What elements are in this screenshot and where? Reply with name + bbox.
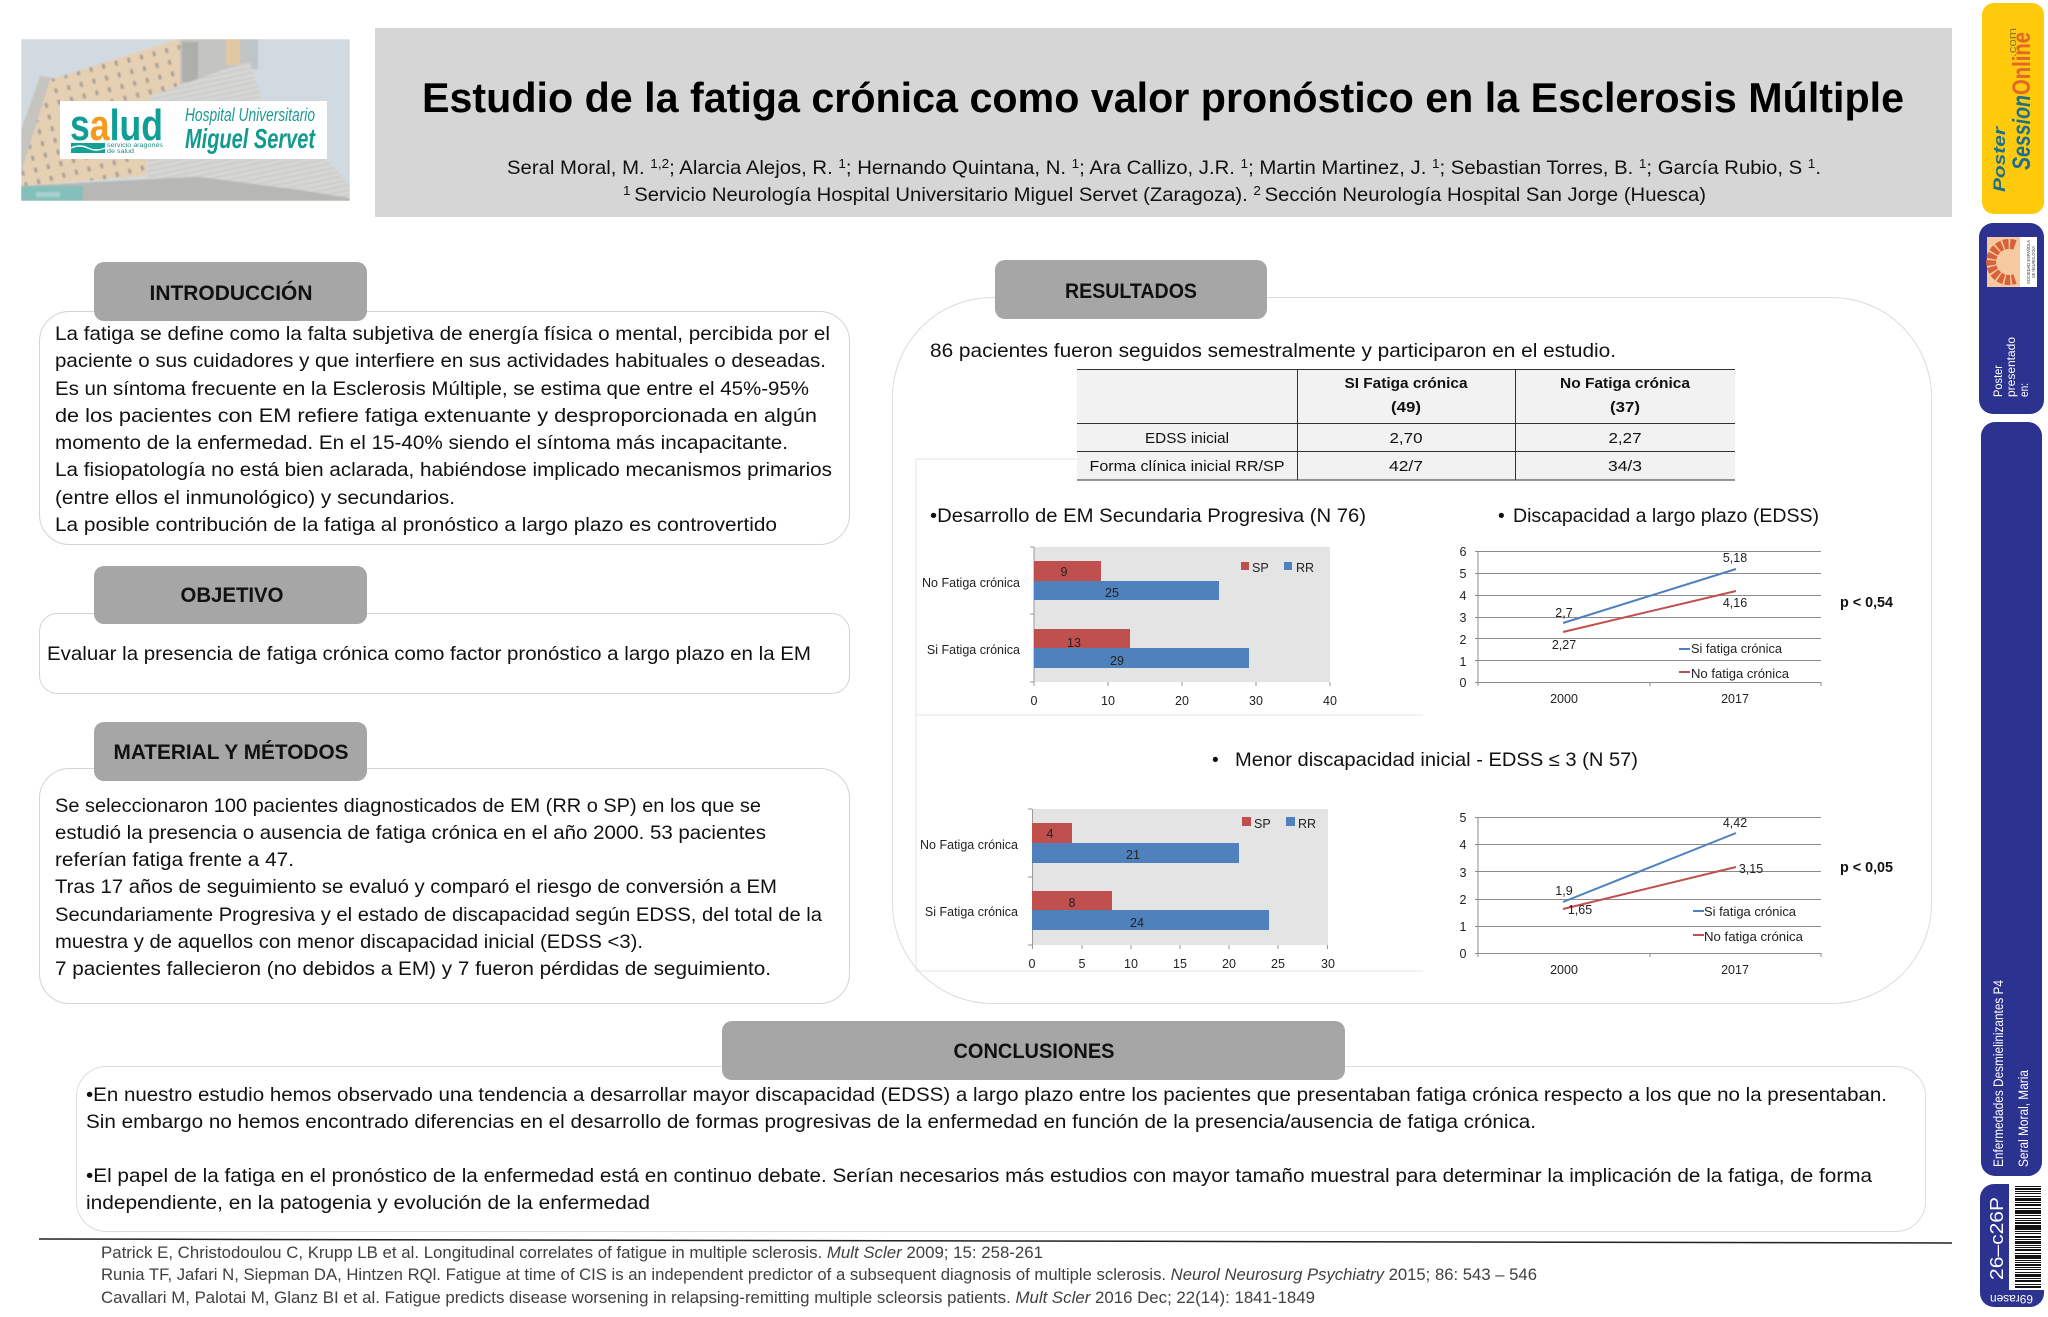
bar chart: desarrollo EM SP: 9 — [1061, 565, 1068, 579]
title banner — [375, 28, 1952, 217]
legend: SP — [1254, 817, 1271, 831]
sidebar: congress badge: SOCIEDAD ESPAÑOLA — [2025, 240, 2031, 284]
heading: objetivo: OBJETIVO — [180, 584, 284, 607]
bar chart: menor discapacidad: 8 — [1069, 896, 1076, 910]
references — [101, 1244, 1537, 1307]
table: baseline characteristics: 34/3 — [1608, 458, 1642, 475]
authors: ; Alarcia Alejos, R. — [669, 157, 838, 179]
bar chart: desarrollo EM SP: 10 — [1101, 694, 1115, 708]
sidebar: congress badge: Poster — [1991, 365, 2005, 397]
legend: No fatiga crónica — [1704, 930, 1803, 944]
sidebar: poster session online logo — [1982, 3, 2044, 214]
text: material y métodos: Se seleccionaron 100 pacientes diagnosticados de EM (RR o SP) en los que se — [55, 796, 761, 817]
heading: resultados — [995, 260, 1267, 319]
panel: objetivo — [40, 566, 850, 694]
line chart: discapacidad a largo plazo: 2 — [1460, 633, 1467, 647]
line chart: menor discapacidad: 0 — [1460, 947, 1467, 961]
legend — [1693, 905, 1803, 944]
line chart: discapacidad a largo plazo: 6 — [1460, 545, 1467, 559]
line chart: discapacidad a largo plazo: 4 — [1460, 589, 1467, 603]
bar chart: menor discapacidad: 24 — [1130, 916, 1144, 930]
text: introducción: La fisiopatología no está bien aclarada, habiéndose implicado mecanismos primarios — [55, 460, 832, 481]
authors: 1,2 — [650, 156, 669, 171]
text: introducción: de los pacientes con EM refiere fatiga extenuante y desproporcionada en algún — [55, 406, 817, 427]
table: baseline characteristics: SI Fatiga crónica — [1344, 375, 1468, 392]
line chart: discapacidad a largo plazo: 2,7 — [1555, 606, 1573, 620]
panel: conclusiones — [76, 1021, 1926, 1232]
hospital photo with logo: salud — [70, 101, 163, 150]
affiliations: Sección Neurología Hospital San Jorge (Huesca) — [1265, 184, 1706, 206]
heading: discapacidad a largo plazo: • — [1498, 506, 1505, 527]
bar chart: menor discapacidad: 21 — [1126, 848, 1140, 862]
sidebar: session and author: Seral Moral, Maria — [2016, 1070, 2031, 1167]
sidebar: congress badge — [1979, 223, 2044, 414]
legend: Si fatiga crónica — [1704, 905, 1796, 919]
text: material y métodos — [55, 796, 822, 980]
heading: menor discapacidad inicial: Menor discapacidad inicial - EDSS ≤ 3 (N 57) — [1235, 750, 1638, 771]
bar chart: desarrollo EM SP: Si Fatiga crónica — [927, 643, 1020, 657]
legend: No fatiga crónica — [1691, 667, 1789, 681]
line chart: menor discapacidad: 4,42 — [1723, 816, 1747, 830]
heading: introducción — [94, 262, 367, 321]
legend — [1679, 642, 1789, 681]
bar chart: desarrollo EM SP: 40 — [1323, 694, 1337, 708]
bar chart: menor discapacidad: 20 — [1222, 957, 1236, 971]
bar chart: menor discapacidad: 10 — [1124, 957, 1138, 971]
sidebar: congress badge: en: — [2017, 383, 2031, 397]
references: Runia TF, Jafari N, Siepman DA, Hintzen RQl. Fatigue at time of CIS is an independent predictor of a subsequent diagnosis of multiple sclerosis. Neurol Neurosurg Psychiatry 2015; 86: 543 – 546 — [101, 1266, 1537, 1284]
panel: resultados — [892, 260, 1932, 1004]
authors: 1 — [1241, 156, 1248, 171]
table: baseline characteristics: Forma clínica inicial RR/SP — [1090, 458, 1284, 475]
sidebar: congress badge: presentado — [2004, 337, 2018, 397]
line chart: menor discapacidad: 2000 — [1550, 963, 1578, 977]
line chart: menor discapacidad: 1,65 — [1568, 903, 1592, 917]
line chart: discapacidad a largo plazo — [1460, 545, 1821, 706]
line chart: menor discapacidad: 1 — [1460, 920, 1467, 934]
line chart: discapacidad a largo plazo: 2,27 — [1552, 638, 1576, 652]
bar chart: menor discapacidad: 15 — [1173, 957, 1187, 971]
affiliations: 1 — [623, 183, 634, 198]
authors: ; Ara Callizo, J.R. — [1079, 157, 1241, 179]
bar chart: menor discapacidad: 25 — [1271, 957, 1285, 971]
authors: ; Martin Martinez, J. — [1248, 157, 1432, 179]
bar chart: menor discapacidad: 5 — [1079, 957, 1086, 971]
sidebar: barcode — [1980, 1184, 2044, 1307]
panel: introducción — [40, 262, 850, 544]
bar chart: desarrollo EM SP: 20 — [1175, 694, 1189, 708]
authors: ; García Rubio, S — [1646, 157, 1808, 179]
line chart: menor discapacidad: 1,9 — [1555, 884, 1573, 898]
heading: objetivo — [94, 566, 367, 624]
table: baseline characteristics: 2,70 — [1390, 430, 1422, 447]
sidebar: congress badge: DE NEUROLOGÍA — [2030, 246, 2036, 278]
text: introducción: La posible contribución de la fatiga al pronóstico a largo plazo es controvertido — [55, 515, 777, 536]
line chart: menor discapacidad: 3,15 — [1739, 862, 1763, 876]
sidebar: barcode: 26–c26P — [1987, 1197, 2007, 1280]
hospital photo with logo: Miguel Servet — [185, 123, 316, 154]
sidebar: poster session online logo: Online — [2008, 32, 2036, 95]
p value: p < 0,05 — [1840, 860, 1893, 876]
authors: ; Sebastian Torres, B. — [1440, 157, 1639, 179]
sidebar: poster session online logo: .com — [2007, 28, 2019, 57]
p value: p < 0,54 — [1840, 595, 1893, 611]
line chart: menor discapacidad: 3 — [1460, 866, 1467, 880]
line chart: discapacidad a largo plazo: 1 — [1460, 655, 1467, 669]
affiliations: Servicio Neurología Hospital Universitario Miguel Servet (Zaragoza). — [634, 184, 1253, 206]
authors: 1 — [1432, 156, 1440, 171]
legend: RR — [1296, 561, 1314, 575]
panel: material y métodos — [40, 722, 850, 1004]
legend: SP — [1252, 561, 1269, 575]
hospital photo with logo — [21, 39, 350, 201]
text: conclusiones: •El papel de la fatiga en el pronóstico de la enfermedad está en continuo debate. Serían necesarios más estudios con mayor tamaño muestral para determinar la implicación de la fatiga, de forma — [86, 1166, 1872, 1187]
bar chart: menor discapacidad — [920, 809, 1335, 971]
bar chart: desarrollo EM SP: 30 — [1249, 694, 1263, 708]
line chart: discapacidad a largo plazo: 4,16 — [1723, 596, 1747, 610]
text: introducción: momento de la enfermedad. En el 15-40% siendo el síntoma más incapacitante. — [55, 433, 788, 454]
hospital photo with logo: de salud — [107, 148, 134, 155]
heading: conclusiones — [722, 1021, 1345, 1080]
text: introducción — [55, 324, 832, 536]
bar chart: desarrollo EM SP: 13 — [1067, 636, 1081, 650]
authors: 1 — [1808, 156, 1815, 171]
bar chart: menor discapacidad: Si Fatiga crónica — [925, 905, 1018, 919]
text: objetivo: Evaluar la presencia de fatiga crónica como factor pronóstico a largo plazo en la EM — [47, 644, 811, 665]
affiliations: 2 — [1253, 183, 1265, 198]
sidebar: session and author — [1981, 422, 2042, 1176]
line chart: discapacidad a largo plazo: 2017 — [1721, 692, 1749, 706]
line chart: discapacidad a largo plazo: 3 — [1460, 611, 1467, 625]
text: conclusiones: independiente, en la patogenia y evolución de la enfermedad — [86, 1193, 650, 1214]
bar chart: desarrollo EM SP — [922, 547, 1337, 708]
heading: menor discapacidad inicial: • — [1212, 750, 1219, 771]
bar chart: desarrollo EM SP: 0 — [1031, 694, 1038, 708]
table: baseline characteristics: EDSS inicial — [1145, 430, 1229, 447]
text: material y métodos: Secundariamente Progresiva y el estado de discapacidad según EDSS, del total de la — [55, 905, 822, 926]
table: baseline characteristics: 2,27 — [1608, 430, 1642, 447]
table: baseline characteristics: No Fatiga crónica — [1560, 375, 1691, 392]
bar chart: desarrollo EM SP: No Fatiga crónica — [922, 576, 1020, 590]
references: Cavallari M, Palotai M, Glanz BI et al. Fatigue predicts disease worsening in relapsing-remitting multiple scleorsis patients. Mult Scler 2016 Dec; 22(14): 1841-1849 — [101, 1289, 1315, 1307]
bar chart: desarrollo EM SP: 25 — [1105, 586, 1119, 600]
legend: Si fatiga crónica — [1691, 642, 1782, 656]
line chart: discapacidad a largo plazo: 5,18 — [1723, 551, 1747, 565]
table: baseline characteristics — [1077, 369, 1735, 480]
text: conclusiones: Sin embargo no hemos encontrado diferencias en el desarrollo de formas progresivas de la enfermedad en función de la presencia/ausencia de fatiga crónica. — [86, 1112, 1536, 1133]
text: patients: 86 pacientes fueron seguidos semestralmente y participaron en el estudio. — [930, 341, 1616, 362]
text: introducción: La fatiga se define como la falta subjetiva de energía física o mental, percibida por el — [55, 324, 830, 345]
text: material y métodos: 7 pacientes fallecieron (no debidos a EM) y 7 fueron pérdidas de seguimiento. — [55, 959, 771, 980]
text: material y métodos: muestra y de aquellos con menor discapacidad inicial (EDSS <3). — [55, 932, 643, 953]
heading: desarrollo EM SP: •Desarrollo de EM Secundaria Progresiva (N 76) — [930, 506, 1366, 527]
line chart: menor discapacidad: 2 — [1460, 893, 1467, 907]
line chart: menor discapacidad: 5 — [1460, 811, 1467, 825]
references: Patrick E, Christodoulou C, Krupp LB et al. Longitudinal correlates of fatigue in multiple sclerosis. Mult Scler 2009; 15: 258-261 — [101, 1244, 1043, 1262]
bar chart: menor discapacidad: 30 — [1321, 957, 1335, 971]
title: Estudio de la fatiga crónica como valor pronóstico en la Esclerosis Múltiple — [422, 74, 1904, 121]
line chart: discapacidad a largo plazo: 0 — [1460, 676, 1467, 690]
legend — [1241, 561, 1314, 575]
line chart: menor discapacidad: 2017 — [1721, 963, 1749, 977]
heading: material y métodos: MATERIAL Y MÉTODOS — [114, 741, 348, 764]
bar chart: menor discapacidad: No Fatiga crónica — [920, 838, 1018, 852]
text: conclusiones — [86, 1085, 1887, 1214]
hospital photo with logo: servicio aragonés — [107, 142, 164, 149]
text: introducción: (entre ellos el inmunológico) y secundarios. — [55, 488, 455, 509]
line chart: discapacidad a largo plazo: 2000 — [1550, 692, 1578, 706]
bar chart: menor discapacidad: 4 — [1047, 827, 1054, 841]
sidebar: barcode: 69rasen — [1990, 1292, 2033, 1304]
bar chart: menor discapacidad: 0 — [1029, 957, 1036, 971]
table: baseline characteristics: 42/7 — [1389, 458, 1423, 475]
authors: 1 — [1639, 156, 1646, 171]
legend — [1242, 817, 1316, 831]
sidebar: poster session online logo: Poster — [1990, 125, 2009, 192]
heading: material y métodos — [94, 722, 367, 781]
text: introducción: paciente o sus cuidadores y que interfiere en sus actividades habituales o deseadas. — [55, 351, 826, 372]
line chart: menor discapacidad: 4 — [1460, 838, 1467, 852]
text: material y métodos: referían fatiga frente a 47. — [55, 850, 294, 871]
line chart: menor discapacidad — [1460, 811, 1821, 977]
heading: conclusiones: CONCLUSIONES — [954, 1040, 1114, 1063]
hospital photo with logo: Hospital Universitario — [185, 105, 315, 125]
text: introducción: Es un síntoma frecuente en la Esclerosis Múltiple, se estima que entre el 45%-95% — [55, 379, 809, 400]
heading: introducción: INTRODUCCIÓN — [150, 281, 312, 305]
text: material y métodos: estudió la presencia o ausencia de fatiga crónica en el año 2000. 53 pacientes — [55, 823, 766, 844]
legend: RR — [1298, 817, 1316, 831]
authors: . — [1815, 157, 1821, 179]
authors: ; Hernando Quintana, N. — [846, 157, 1072, 179]
line chart: discapacidad a largo plazo: 5 — [1460, 567, 1467, 581]
authors: 1 — [838, 156, 846, 171]
text: conclusiones: •En nuestro estudio hemos observado una tendencia a desarrollar mayor discapacidad (EDSS) a largo plazo entre los pacientes que presentaban fatiga crónica respecto a los que no la presentaban. — [86, 1085, 1887, 1106]
sidebar: poster session online logo: Session — [2008, 95, 2036, 170]
heading: resultados: RESULTADOS — [1065, 280, 1197, 303]
heading: discapacidad a largo plazo: Discapacidad a largo plazo (EDSS) — [1513, 506, 1819, 527]
table: baseline characteristics: (37) — [1610, 399, 1640, 416]
sidebar: session and author: Enfermedades Desmielinizantes P4 — [1991, 980, 2006, 1167]
authors: 1 — [1072, 156, 1079, 171]
table: baseline characteristics: (49) — [1391, 399, 1421, 416]
authors: Seral Moral, M. — [507, 157, 639, 179]
bar chart: desarrollo EM SP: 29 — [1110, 654, 1124, 668]
text: material y métodos: Tras 17 años de seguimiento se evaluó y comparó el riesgo de conversión a EM — [55, 877, 777, 898]
